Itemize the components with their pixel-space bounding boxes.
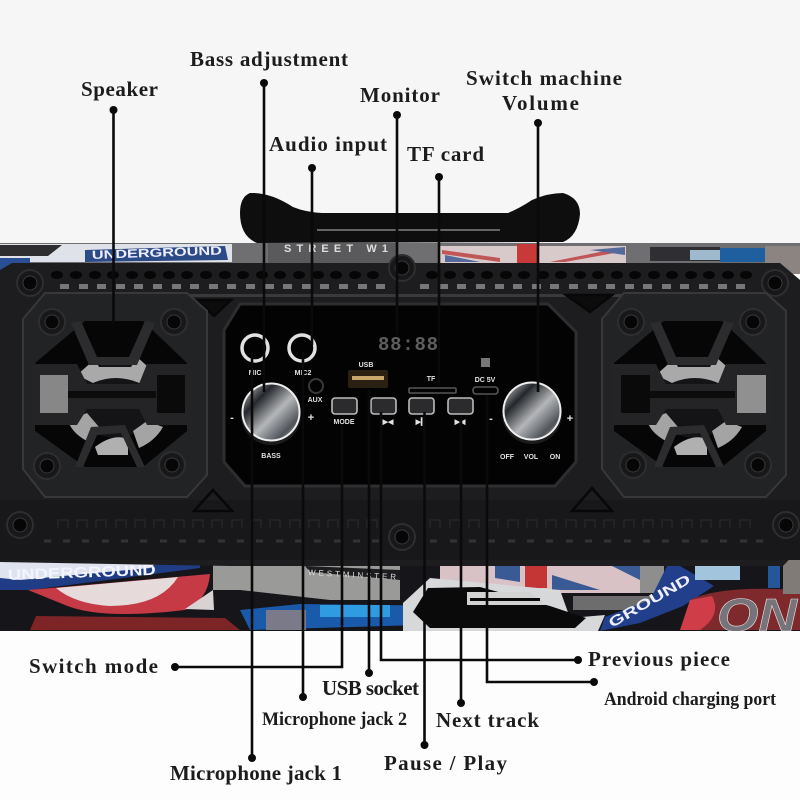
callout: previous piece xyxy=(381,412,730,671)
text: street w1: STREET W1 xyxy=(284,243,388,255)
callout: pause play: Pause / Play xyxy=(384,751,508,775)
left speaker screws xyxy=(34,309,187,479)
callout: android charging port xyxy=(487,395,777,710)
callout: speaker xyxy=(81,77,158,324)
callout: switch machine volume: Switch machine xyxy=(466,66,622,90)
bottom grille rows xyxy=(44,520,763,541)
panel labels: DC 5V xyxy=(475,377,496,384)
left speaker xyxy=(23,293,207,497)
volume knob xyxy=(502,382,562,444)
callout: microphone jack 1: Microphone jack 1 xyxy=(170,761,342,785)
callout: speaker: Speaker xyxy=(81,77,158,101)
bottom white xyxy=(0,631,800,800)
aux jack xyxy=(309,379,323,393)
panel labels: OFF xyxy=(500,454,515,461)
callout: microphone jack 2 xyxy=(262,352,407,730)
mode buttons xyxy=(332,398,473,414)
callout: switch machine volume xyxy=(466,66,622,392)
right speaker xyxy=(602,293,786,497)
text: westminster sticker: WESTMINSTER xyxy=(308,568,396,582)
callout: next track xyxy=(436,420,539,732)
callout: pause play xyxy=(384,412,508,775)
panel labels: MODE xyxy=(334,419,355,426)
top dot row xyxy=(51,271,752,279)
panel labels: ▶◀ xyxy=(382,419,394,426)
speaker body xyxy=(0,263,800,566)
background xyxy=(0,0,800,243)
callout: monitor xyxy=(360,83,440,335)
panel labels xyxy=(230,362,573,461)
top tab row xyxy=(60,284,745,289)
panel labels: VOL xyxy=(524,454,539,461)
graffiti strip: top xyxy=(0,243,800,274)
callout: microphone jack 1 xyxy=(170,352,342,785)
panel labels: + xyxy=(567,413,573,425)
callout: switch machine volume: Volume xyxy=(502,91,579,115)
callout: usb socket: USB socket xyxy=(322,676,419,700)
callout: audio input xyxy=(269,132,387,345)
panel labels: AUX xyxy=(308,397,323,404)
text: westminster xyxy=(305,566,400,580)
text: underground bottom: UNDERGROUND xyxy=(8,562,156,584)
callout: bass adjustment: Bass adjustment xyxy=(190,47,348,71)
text: ground: GROUND xyxy=(606,571,693,631)
tf slot and dc port xyxy=(409,358,498,394)
panel labels: - xyxy=(230,412,234,424)
callout: usb socket xyxy=(322,390,419,700)
panel labels: MIC xyxy=(249,370,261,377)
callout: tf card: TF card xyxy=(407,142,484,166)
callout: microphone jack 2: Microphone jack 2 xyxy=(262,709,407,730)
text: on: ON xyxy=(717,589,798,641)
panel labels: USB xyxy=(359,362,373,369)
callout: next track: Next track xyxy=(436,708,539,732)
panel labels: + xyxy=(308,412,314,424)
panel labels: BASS xyxy=(261,453,281,460)
text: underground top: UNDERGROUND xyxy=(92,243,222,262)
display: 88:88 xyxy=(378,334,438,356)
callout: tf card xyxy=(407,142,484,385)
callout: bass adjustment xyxy=(190,47,348,392)
callout: audio input: Audio input xyxy=(269,132,387,156)
body screws xyxy=(7,255,799,550)
right speaker screws xyxy=(618,309,771,478)
usb port xyxy=(348,370,388,388)
mic rings xyxy=(242,335,315,361)
car xyxy=(413,587,586,628)
graffiti strip: bottom xyxy=(0,545,800,641)
panel labels: ON xyxy=(550,454,560,461)
panel labels: - xyxy=(489,413,493,425)
callout: monitor: Monitor xyxy=(360,83,440,107)
panel labels: ▶◀ xyxy=(454,419,466,426)
bass knob xyxy=(241,384,301,445)
panel labels: TF xyxy=(427,376,436,383)
handle xyxy=(240,193,580,243)
callout: previous piece: Previous piece xyxy=(588,647,730,671)
panel labels: ▶▎ xyxy=(415,417,426,426)
triangles xyxy=(194,295,612,511)
callout: switch mode xyxy=(29,424,342,678)
callout: android charging port: Android charging port xyxy=(604,689,777,710)
control panel xyxy=(224,304,576,486)
callout: switch mode: Switch mode xyxy=(29,654,158,678)
panel labels: MIC2 xyxy=(295,370,311,377)
